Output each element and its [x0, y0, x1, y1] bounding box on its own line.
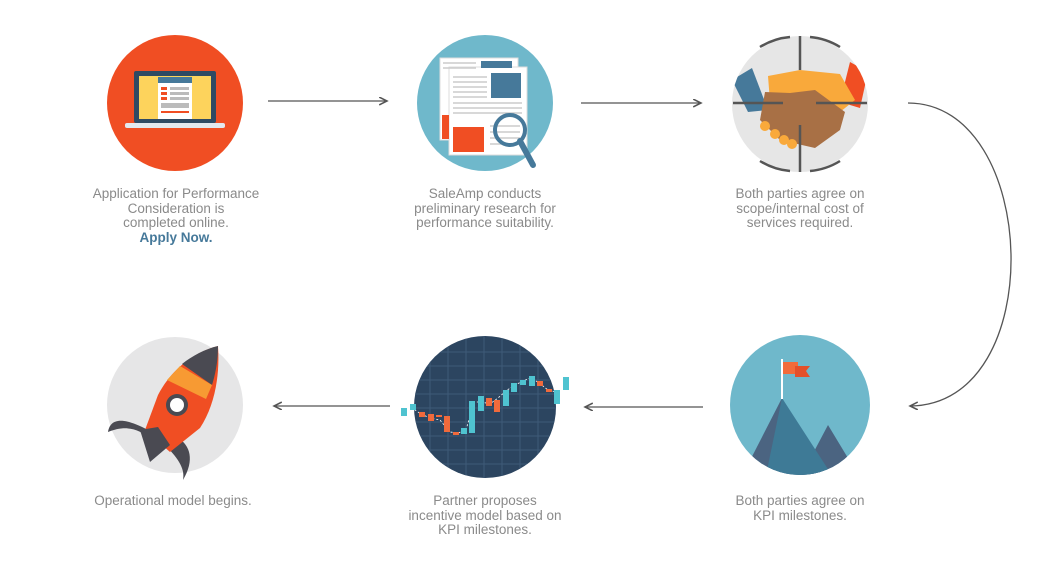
arrow: 5 to 6: [274, 405, 390, 407]
text: step 2: performance suitability.: [416, 215, 554, 230]
icon: laptop: [107, 35, 243, 171]
text: step 3: scope/internal cost of: [736, 201, 864, 216]
icon: candlestick chart: [401, 336, 569, 478]
text: step 2: [414, 186, 556, 230]
text: step 4: Both parties agree on: [735, 493, 865, 508]
text: step 1: completed online.: [123, 215, 229, 230]
text: step 5: KPI milestones.: [438, 522, 532, 537]
text: step 1: [93, 186, 259, 245]
text: step 4: KPI milestones.: [753, 508, 847, 523]
text: step 5: incentive model based on: [408, 508, 562, 523]
arrow: 2 to 3: [581, 102, 701, 104]
text: step 4: [735, 493, 865, 523]
text: step 3: Both parties agree on: [735, 186, 865, 201]
text: step 3: [735, 186, 865, 230]
arrow: 1 to 2: [268, 100, 387, 102]
icon: research document: [417, 35, 553, 171]
icon: handshake: [732, 36, 868, 172]
arrow: 4 to 5: [585, 406, 703, 408]
text: step 1: Consideration is: [128, 201, 225, 216]
text: step 2: SaleAmp conducts: [429, 186, 542, 201]
text: step 5: Partner proposes: [433, 493, 537, 508]
icon: mountain flag: [730, 335, 870, 480]
text: step 3: services required.: [747, 215, 853, 230]
text: step 5: [408, 493, 562, 537]
text: step 1: Apply Now.: [140, 230, 212, 245]
icon: rocket: [107, 337, 243, 480]
text: step 1: Application for Performance: [93, 186, 259, 201]
arrow: curved 3 to 4: [908, 103, 1011, 406]
text: step 6: Operational model begins.: [94, 493, 252, 508]
text: step 2: preliminary research for: [414, 201, 556, 216]
